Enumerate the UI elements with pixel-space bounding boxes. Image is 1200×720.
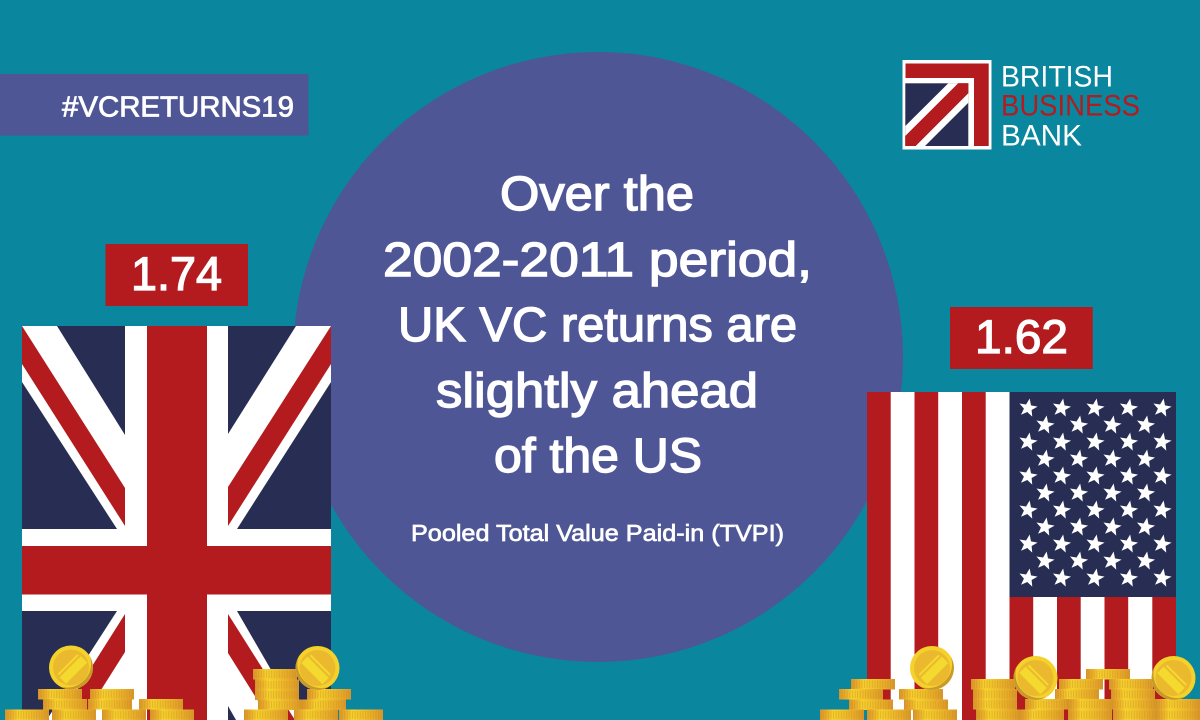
stars (1018, 397, 1173, 587)
US value label (950, 307, 1093, 369)
UK value label (106, 244, 248, 306)
UK flag (22, 326, 331, 720)
logo: British Business Bank: BRITISH (1001, 61, 1113, 94)
hashtag banner: #VCRETURNS19 (62, 92, 294, 124)
US value label: 1.62 (975, 310, 1068, 363)
headline: of the US (494, 430, 702, 483)
headline: UK VC returns are (398, 299, 797, 352)
headline: slightly ahead (436, 365, 758, 418)
coin pile: right (820, 646, 1200, 720)
UK value label: 1.74 (131, 247, 222, 300)
hashtag banner (0, 74, 308, 136)
headline (383, 168, 812, 483)
US flag (867, 392, 1176, 720)
logo: British Business Bank: BUSINESS (1001, 90, 1140, 122)
headline: 2002-2011 period, (383, 234, 812, 287)
central circle (293, 52, 903, 662)
coin pile: left (5, 646, 383, 720)
logo: British Business Bank: BANK (1001, 120, 1082, 153)
headline: Over the (500, 168, 694, 221)
subheading: Pooled Total Value Paid-in (TVPI) (411, 520, 784, 546)
logo: British Business Bank (902, 60, 1140, 153)
